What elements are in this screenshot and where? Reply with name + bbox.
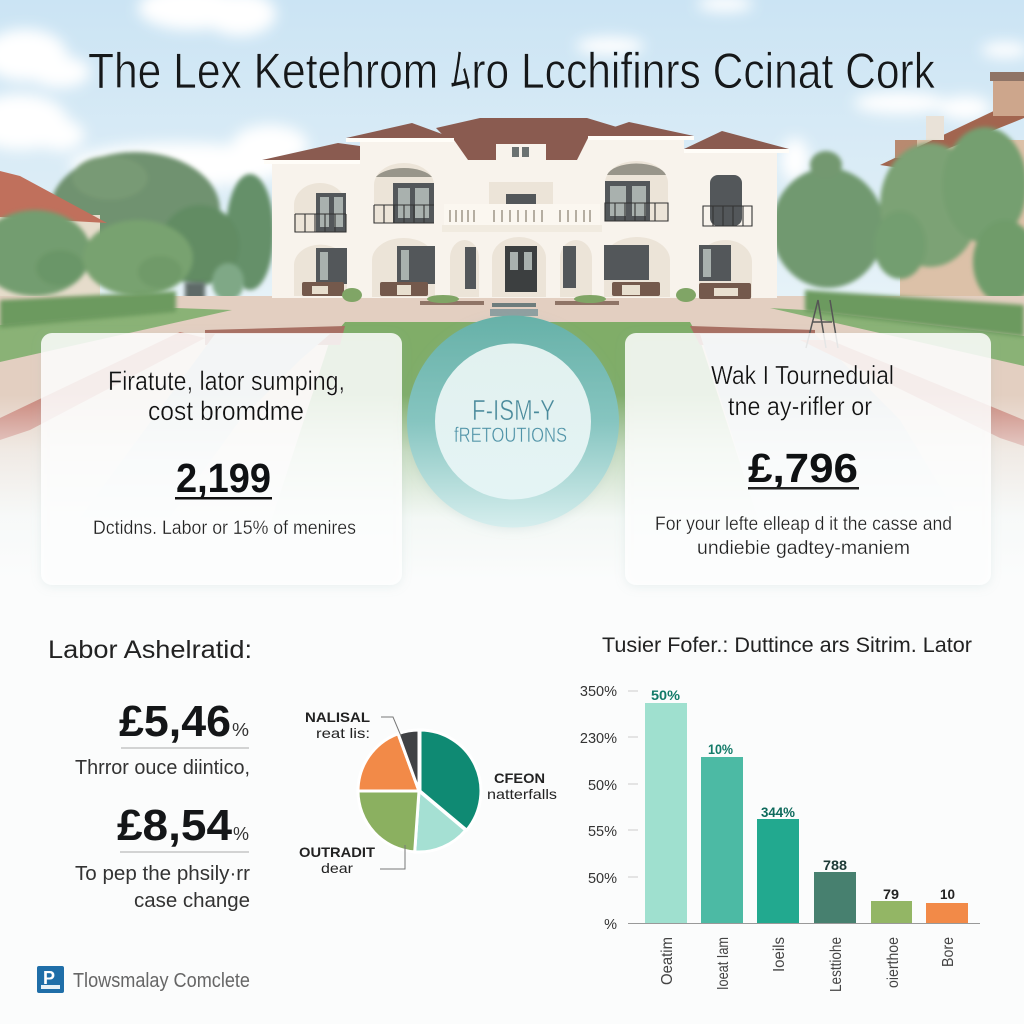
panel: right cost card (625, 333, 991, 585)
card heading (711, 360, 894, 421)
section heading: Labor Ashelratid: (48, 636, 252, 664)
hedges (0, 290, 1024, 337)
windows and doors (316, 175, 742, 292)
pie label right (487, 770, 557, 802)
ladder near the pool (806, 300, 838, 348)
rotated category labels (659, 937, 957, 992)
patio furniture (302, 282, 751, 299)
card note: undiebie gadtey-maniem (697, 538, 910, 559)
y axis labels: 50% (588, 871, 617, 887)
bar value labels: 788 (823, 857, 847, 873)
card note: For your lefte elleap d it the casse and (655, 514, 952, 535)
card background (41, 333, 402, 585)
statistic two: % (233, 824, 249, 844)
clouds (0, 0, 1024, 187)
bar value labels: 10 (940, 886, 955, 902)
lawn and paving (0, 296, 1024, 586)
y axis labels (580, 684, 617, 933)
trees behind left house (50, 152, 274, 290)
card figure: 2,199 (176, 455, 271, 501)
trees in front of left house (0, 210, 244, 301)
card note: Dctidns. Labor or 15% of menires (93, 518, 356, 539)
statistic one: % (232, 720, 249, 740)
roofs (262, 118, 789, 160)
bar chart (580, 684, 980, 992)
pie slices (358, 730, 481, 852)
chart heading: Tusier Fofer.: Duttince ars Sitrim. Lator (602, 634, 972, 657)
card background (625, 333, 991, 585)
icon: logo (37, 966, 64, 993)
pie label top left: reat lis: (316, 725, 370, 741)
bar value labels (651, 687, 955, 902)
central circular badge (407, 316, 619, 528)
card heading: cost bromdme (148, 396, 304, 426)
pie label bottom left: dear (321, 860, 353, 876)
y axis labels: 50% (588, 778, 617, 794)
pie label top left (305, 709, 370, 741)
iron balcony rails (295, 203, 752, 232)
card heading: tne ay-rifler or (728, 391, 872, 421)
card heading: Wak I Tourneduial (711, 360, 894, 390)
walls (272, 138, 777, 298)
dormer windows (512, 147, 529, 157)
rotated category labels: Ioeils (771, 937, 788, 972)
y axis labels: % (604, 917, 617, 933)
source text: Tlowsmalay Comclete (73, 970, 250, 992)
pie label bottom left (299, 844, 375, 876)
statistic two: To pep the phsily·rr (75, 863, 250, 885)
pie leader lines (380, 717, 405, 869)
central circular badge: F-ISM-Y (472, 395, 555, 427)
background photo: villa and garden (0, 0, 1024, 600)
statistic two: case change (134, 890, 250, 912)
card figure: £,796 (748, 445, 858, 491)
statistic two: £8,54 (117, 801, 233, 850)
bar value labels: 344% (761, 804, 796, 820)
y axis labels: 350% (580, 684, 617, 700)
pie label right: CFEON (494, 770, 545, 786)
window panes (320, 186, 711, 280)
axis line (628, 923, 980, 924)
villa (262, 118, 789, 305)
card heading (108, 366, 345, 426)
arch soffits (376, 164, 666, 177)
central circular badge: fRETOUTIONS (454, 424, 567, 447)
statistic one: £5,46 (119, 697, 231, 746)
footer logo and source (37, 966, 250, 993)
section: labor statistics (48, 636, 252, 912)
panel: left cost card (41, 333, 402, 585)
photo fade to white (0, 395, 1024, 600)
bar value labels: 50% (651, 687, 681, 703)
rotated category labels: Bore (940, 937, 957, 967)
arches (294, 161, 752, 297)
eaves (264, 136, 789, 164)
y axis labels: 230% (580, 731, 617, 747)
central balustrade (442, 204, 602, 232)
pie label bottom left: OUTRADIT (299, 844, 375, 860)
planting beds and shrubs (342, 288, 696, 305)
bar value labels: 79 (883, 886, 899, 902)
statistic two (75, 801, 250, 912)
trees right (772, 127, 1024, 304)
card heading: Firatute, lator sumping, (108, 366, 345, 396)
rotated category labels: Ioeat Iam (715, 937, 732, 990)
pie chart (299, 709, 557, 876)
icon: logo: P (43, 968, 55, 988)
rotated category labels: Oeatim (659, 937, 676, 985)
neighbouring house left (0, 171, 107, 297)
y axis labels: 55% (588, 824, 617, 840)
sky (0, 0, 1024, 320)
card note (655, 514, 952, 559)
bar value labels: 10% (708, 741, 733, 757)
pie label right: natterfalls (487, 786, 557, 802)
bars (645, 703, 968, 923)
rotated category labels: Lesttiohe (828, 937, 845, 992)
statistic one (75, 697, 250, 779)
rotated category labels: oierthoe (885, 937, 902, 988)
neighbouring house right (880, 72, 1024, 300)
pie label top left: NALISAL (305, 709, 370, 725)
statistic one: Thrror ouce diintico, (75, 757, 250, 779)
